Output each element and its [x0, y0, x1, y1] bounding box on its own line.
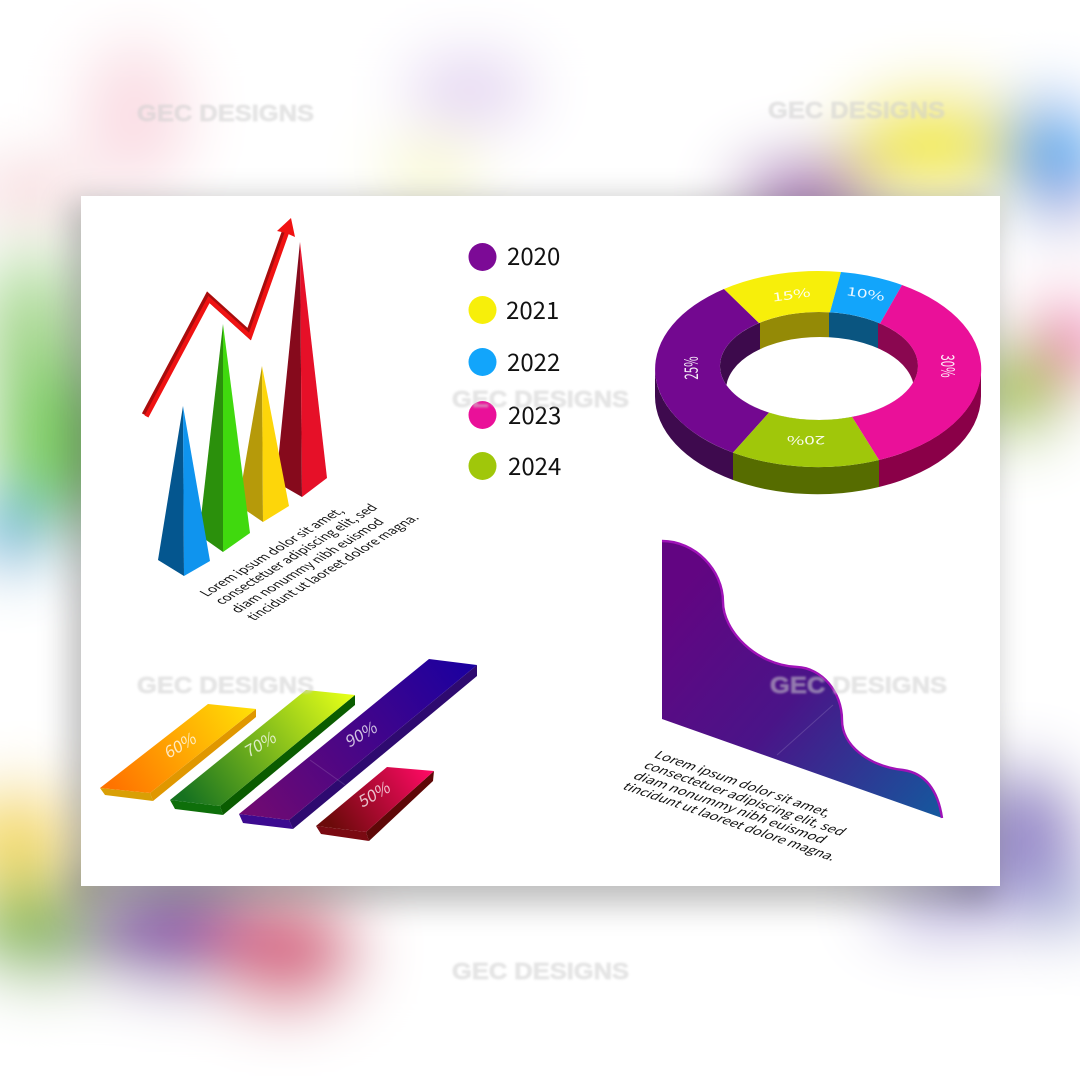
panel shadow — [69, 200, 994, 904]
segment 15% yellow — [724, 271, 841, 323]
watermarks — [137, 97, 947, 984]
text block: wave caption — [619, 747, 852, 864]
bar 70%: 70% — [241, 724, 279, 763]
text block: pyramid caption: Lorem ipsum dolor sit amet, — [193, 504, 348, 599]
text block: pyramid caption: tincidunt ut laoreet dolore magna. — [240, 510, 423, 623]
wave area chart — [662, 541, 942, 818]
donut percentage labels: 15% — [771, 283, 812, 305]
red pyramid — [276, 242, 327, 497]
bar 50% — [316, 767, 434, 841]
text block: wave caption: Lorem ipsum dolor sit amet, — [650, 747, 838, 820]
legend item 2020: 2020 — [507, 237, 560, 272]
watermarks: GEC DESIGNS — [452, 386, 629, 412]
bar 60%: 60% — [161, 725, 199, 764]
legend item 2022 — [468, 343, 560, 378]
donut outer side walls — [655, 369, 981, 494]
segment 25% purple — [655, 289, 769, 453]
bar 90% — [239, 659, 477, 829]
donut percentage labels — [676, 282, 963, 450]
text block: pyramid caption: diam nonummy nibh euismod — [224, 514, 389, 615]
legend item 2021 — [468, 291, 559, 326]
watermarks: GEC DESIGNS — [137, 100, 314, 126]
donut inner wall — [720, 312, 918, 420]
bar chart: isometric bars — [100, 659, 477, 841]
bar 60% — [100, 704, 256, 801]
legend item 2021: 2021 — [506, 291, 559, 326]
watermarks: GEC DESIGNS — [137, 672, 314, 698]
legend item 2022: 2022 — [507, 343, 560, 378]
legend item 2020 — [468, 237, 560, 272]
donut percentage labels: 30% — [935, 354, 963, 378]
donut percentage labels: 10% — [845, 282, 886, 305]
watermarks: GEC DESIGNS — [770, 672, 947, 698]
bar 50%: 50% — [355, 774, 393, 813]
segment 20% green — [733, 413, 879, 467]
text block: wave caption: consectetuer adipiscing elit, sed — [640, 757, 852, 839]
blue pyramid — [158, 406, 210, 576]
legend item 2023 — [468, 396, 561, 431]
donut percentage labels: 25% — [676, 356, 704, 380]
yellow pyramid — [238, 366, 289, 522]
text block: wave caption: tincidunt ut laoreet dolore magna. — [619, 778, 843, 864]
segment 10% blue — [830, 272, 902, 324]
pyramid chart with rising arrow — [145, 218, 327, 576]
bar 90%: 90% — [342, 714, 380, 753]
watermarks: GEC DESIGNS — [768, 97, 945, 123]
watermarks: GEC DESIGNS — [452, 958, 629, 984]
text block: wave caption: diam nonummy nibh euismod — [629, 768, 833, 846]
text block: pyramid caption: consectetuer adipiscing elit, sed — [208, 500, 382, 607]
arrow: rising trend line — [145, 218, 295, 416]
segment 30% pink — [852, 285, 981, 460]
legend — [468, 237, 561, 482]
white panel — [81, 196, 1000, 886]
legend item 2023: 2023 — [508, 396, 561, 431]
legend item 2024: 2024 — [508, 447, 561, 482]
bar 70% — [170, 690, 355, 815]
green pyramid — [199, 324, 250, 552]
legend item 2024 — [468, 447, 561, 482]
donut percentage labels: 20% — [787, 432, 825, 450]
donut chart — [655, 271, 981, 494]
